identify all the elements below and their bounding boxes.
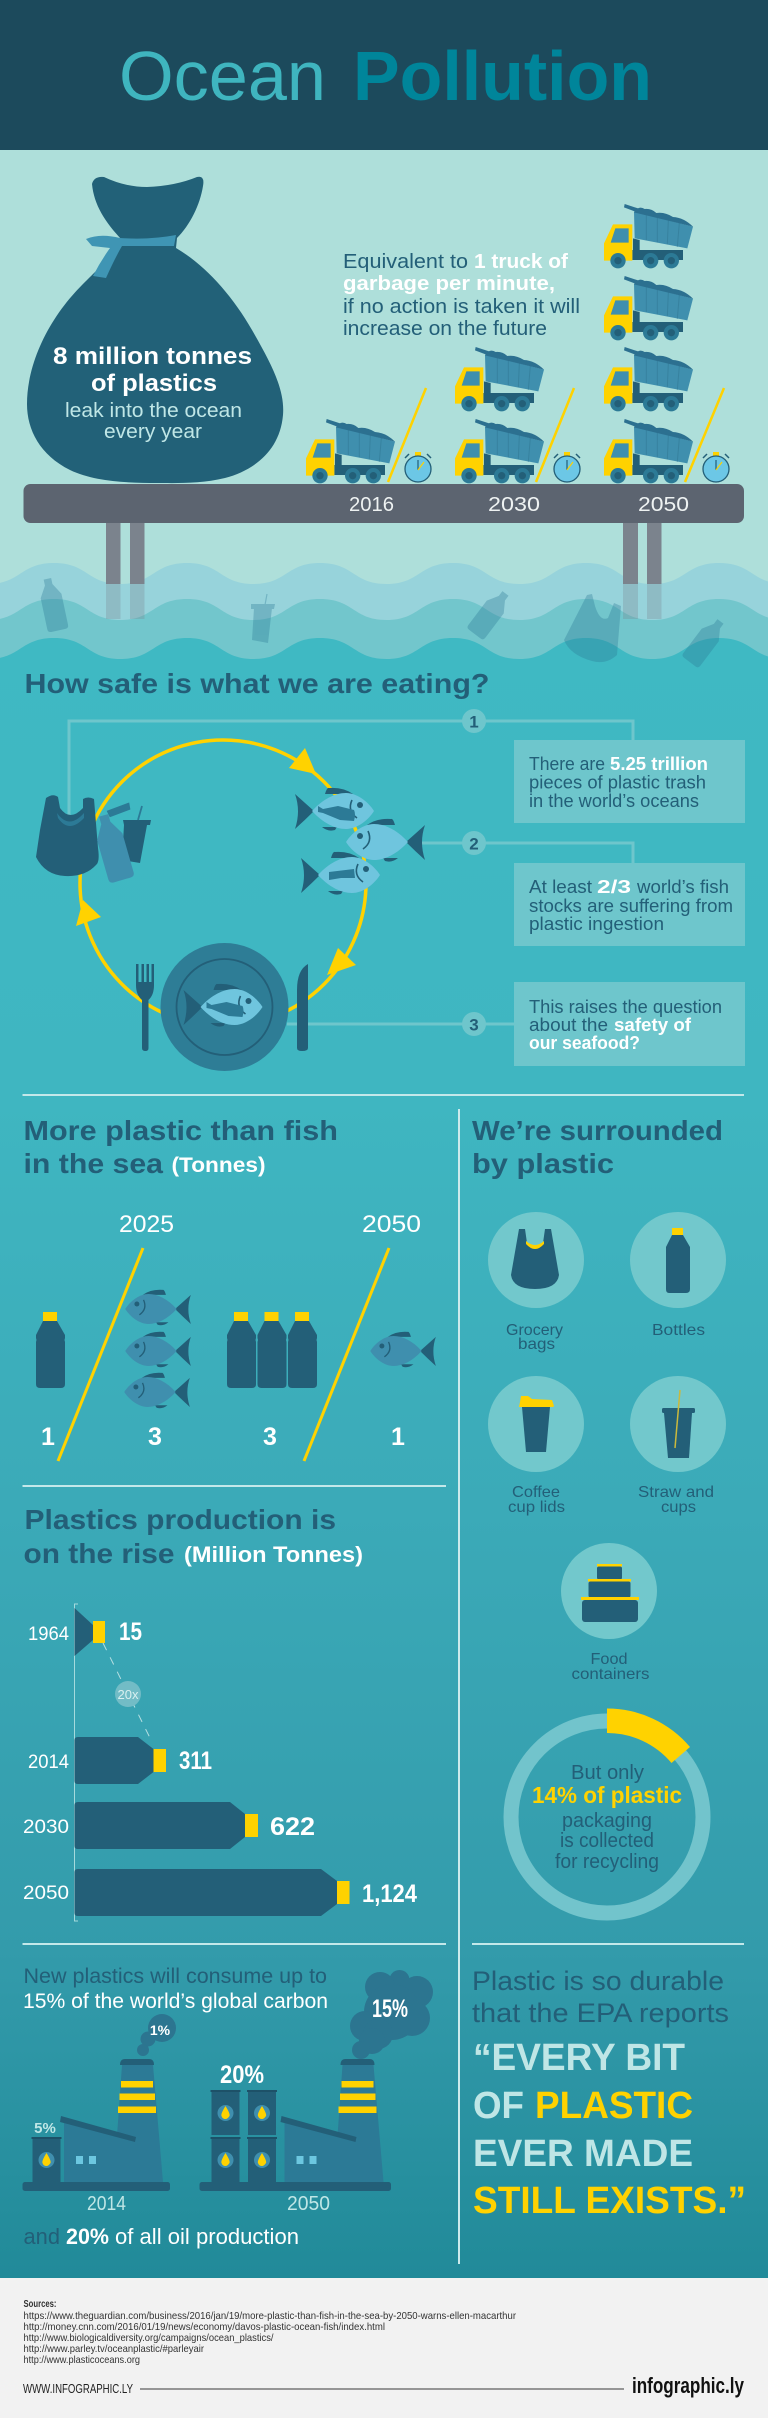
donut text: packaging: [562, 1810, 652, 1832]
icon: straw and cups: [630, 1376, 726, 1472]
icon: 1 bottle: [36, 1312, 65, 1388]
bag tie: [86, 235, 176, 278]
factory 2050: 15%: [372, 1995, 408, 2023]
14 percent arc: [607, 1708, 690, 1763]
garbage bag with text: [27, 177, 283, 483]
donut text: for recycling: [555, 1851, 659, 1873]
truck caption: increase on the future: [343, 318, 547, 340]
label: food containers: [572, 1651, 650, 1683]
title: [119, 37, 652, 115]
sources: http://www.biologicaldiversity.org/campaigns/ocean_plastics/: [24, 2332, 274, 2344]
callout 3: This raises the question: [529, 997, 722, 1017]
icon: plate with fish: [160, 943, 288, 1071]
label: food containers: containers: [572, 1666, 650, 1683]
label: coffee cup lids: [508, 1484, 565, 1516]
quote: “EVERY BIT: [473, 2037, 685, 2079]
callout 2: world’s fish: [636, 877, 729, 897]
callout 3: safety of: [614, 1015, 692, 1035]
counts: [41, 1423, 405, 1451]
text: oil production: and: [24, 2224, 60, 2249]
label: straw and cups: [638, 1484, 714, 1516]
smoke big: [350, 1970, 433, 2059]
bag text: leak into the ocean: [65, 400, 242, 422]
label: grocery bags: [506, 1322, 563, 1353]
bar 1964: [28, 1608, 142, 1656]
quote: EVER MADE: [473, 2133, 693, 2175]
donut text: is collected: [560, 1830, 654, 1852]
bar 1964: 15: [119, 1618, 142, 1646]
factory 2050: [200, 1970, 433, 2215]
text: new plastics: [23, 1965, 328, 2013]
text: oil production: 20%: [66, 2224, 109, 2249]
heading: plastics production: (Million Tonnes): [184, 1542, 363, 1567]
20x marker: 20x: [118, 1687, 139, 1702]
sky background: [0, 150, 768, 650]
callout 1: in the world’s oceans: [529, 791, 699, 811]
bar 2030: 2030: [23, 1817, 69, 1838]
bag text: [53, 343, 252, 443]
recycling donut: [511, 1708, 703, 1913]
bar 2050: 1,124: [362, 1880, 417, 1908]
icon: food containers: [561, 1543, 657, 1639]
icon: grocery bags: [488, 1212, 584, 1308]
20x marker: [115, 1681, 141, 1707]
sources: [24, 2298, 516, 2366]
smoke small: [137, 2014, 176, 2056]
bar 2014: [28, 1737, 212, 1784]
callout 2: [514, 863, 745, 946]
heading: more plastic than fish: in the sea: [24, 1148, 163, 1179]
floating plastic in waves: [37, 577, 729, 669]
pier legs: [106, 523, 662, 619]
bar 2050: 2050: [23, 1883, 69, 1904]
yellow cycle: [76, 740, 366, 1026]
quote: OF: [473, 2085, 524, 2127]
text: new plastics: 15% of the world’s global carbon: [23, 1990, 328, 2013]
plastic vs fish chart: [36, 1211, 436, 1461]
trucks 2030: [455, 347, 580, 483]
icon: plastic trash group: [36, 795, 151, 884]
text: so durable: Plastic is so durable: [472, 1966, 724, 1996]
text: so durable: that the EPA reports: [472, 1998, 729, 2028]
icon: fork: [136, 964, 154, 1051]
bottle bar chart: [23, 1604, 417, 1921]
sources: http://www.parley.tv/oceanplastic/#parleyair: [24, 2343, 204, 2355]
heading: surrounded by plastic: by plastic: [472, 1148, 614, 1179]
text: new plastics: New plastics will consume up to: [24, 1965, 327, 1988]
truck caption: Equivalent to: [343, 251, 468, 273]
year 2025: 2025: [119, 1211, 174, 1238]
footer credit: WWW.INFOGRAPHIC.LY: [23, 2381, 133, 2396]
donut text: But only: [571, 1762, 644, 1784]
callout 3: about the: [529, 1015, 608, 1035]
icon: coffee cup lids: [488, 1376, 584, 1472]
bag text: of plastics: [91, 370, 217, 397]
label: straw and cups: cups: [661, 1499, 696, 1516]
factory 2014: [22, 2014, 176, 2215]
waves: [0, 563, 768, 680]
heading: more plastic than fish: (Tonnes): [172, 1154, 266, 1177]
heading: surrounded by plastic: [472, 1115, 723, 1179]
label: grocery bags: bags: [518, 1336, 555, 1353]
year 2050: 2050: [362, 1211, 421, 1238]
label: bottles: Bottles: [652, 1322, 705, 1339]
quote: STILL EXISTS.”: [473, 2180, 746, 2222]
label: grocery bags: Grocery: [506, 1322, 563, 1339]
bar 1964: 1964: [28, 1624, 69, 1645]
trucks 2050: [604, 204, 729, 483]
trucks 2016: [306, 388, 431, 483]
heading: plastics production: [24, 1504, 363, 1569]
label: coffee cup lids: cup lids: [508, 1499, 565, 1516]
footer credit: [23, 2373, 745, 2398]
callout 2: plastic ingestion: [529, 914, 664, 934]
text: oil production: of all oil production: [115, 2224, 299, 2249]
numbered markers: 1: [469, 712, 479, 732]
label: food containers: Food: [590, 1651, 628, 1668]
icon: 3 fish: [124, 1290, 191, 1408]
bag shape: [27, 177, 283, 483]
counts: 1: [391, 1423, 405, 1451]
oil barrels: [210, 2090, 277, 2182]
sources: Sources:: [24, 2298, 56, 2310]
callout 1: [514, 740, 745, 823]
heading: how safe: How safe is what we are eating?: [24, 668, 490, 699]
sources: https://www.theguardian.com/business/2016/jan/19/more-plastic-than-fish-in-the-sea-by-2050-warns-ellen-macarthur: [24, 2310, 516, 2322]
20 percent: 20%: [220, 2061, 264, 2089]
callout 2: 2/3: [597, 877, 631, 897]
callout 2: stocks are suffering from: [529, 896, 733, 916]
heading: more plastic than fish: More plastic than fish: [24, 1115, 338, 1146]
bar 2030: [23, 1802, 315, 1849]
counts: 3: [263, 1423, 277, 1451]
heading: plastics production: on the rise: [24, 1538, 174, 1569]
sources: http://www.plasticoceans.org: [24, 2354, 140, 2366]
truck caption: 1 truck of: [474, 251, 568, 273]
title: Pollution: [353, 37, 652, 115]
header band: [0, 0, 768, 150]
callout 1: There are: [529, 754, 605, 774]
counts: 1: [41, 1423, 55, 1451]
bar 2050: [23, 1869, 417, 1916]
connector lines: [69, 721, 633, 1024]
title: Ocean: [119, 37, 326, 115]
text: oil production: [24, 2224, 299, 2249]
2050 label: 2050: [287, 2193, 330, 2215]
heading: more plastic than fish: [24, 1115, 338, 1179]
icon: 3 bottles: [227, 1312, 317, 1388]
numbered markers: 3: [469, 1016, 479, 1034]
donut text: [532, 1762, 682, 1873]
icon: fish with plastic 1: [295, 788, 374, 831]
heading: surrounded by plastic: We’re surrounded: [472, 1115, 723, 1146]
text: so durable: [472, 1966, 729, 2028]
5 percent: 5%: [34, 2120, 56, 2137]
truck caption: garbage per minute,: [343, 273, 555, 295]
bar 2030: 622: [270, 1813, 315, 1841]
pier platform with years: [24, 484, 744, 523]
bag text: every year: [104, 421, 202, 443]
icon: knife: [297, 964, 308, 1051]
sea background: [0, 640, 768, 2278]
donut text: 14% of plastic: [532, 1782, 682, 1808]
icon: 1 fish: [370, 1332, 436, 1367]
bar 2014: 311: [179, 1747, 212, 1775]
quote: [473, 2037, 746, 2222]
truck caption: if no action is taken it will: [343, 296, 580, 318]
icon: fish 2: [346, 819, 425, 862]
2014 label: 2014: [87, 2193, 126, 2215]
callout 1: pieces of plastic trash: [529, 772, 706, 792]
label: straw and cups: Straw and: [638, 1484, 714, 1501]
callout 1: 5.25 trillion: [610, 754, 708, 774]
icon: fish with plastic 3: [301, 852, 380, 895]
truck caption: [343, 251, 580, 340]
counts: 3: [148, 1423, 162, 1451]
icon: bottles: [630, 1212, 726, 1308]
numbered markers: 2: [469, 834, 479, 854]
sources: http://money.cnn.com/2016/01/19/news/economy/davos-plastic-ocean-fish/index.html: [24, 2321, 385, 2333]
bar 2014: 2014: [28, 1752, 69, 1773]
bag text: 8 million tonnes: [53, 343, 252, 370]
quote: PLASTIC: [535, 2085, 693, 2127]
footer background: [0, 2278, 768, 2418]
pier platform with years: 2030: [488, 494, 540, 516]
pier platform with years: 2016: [349, 494, 394, 516]
pier platform with years: 2050: [638, 494, 689, 516]
callout 2: At least: [529, 877, 592, 897]
callout 3: [514, 982, 745, 1066]
numbered markers: [462, 709, 486, 1036]
factory 2014: 1%: [150, 2022, 171, 2038]
callout 3: our seafood?: [529, 1033, 640, 1053]
heading: plastics production: Plastics production is: [24, 1504, 336, 1535]
label: coffee cup lids: Coffee: [512, 1484, 560, 1501]
